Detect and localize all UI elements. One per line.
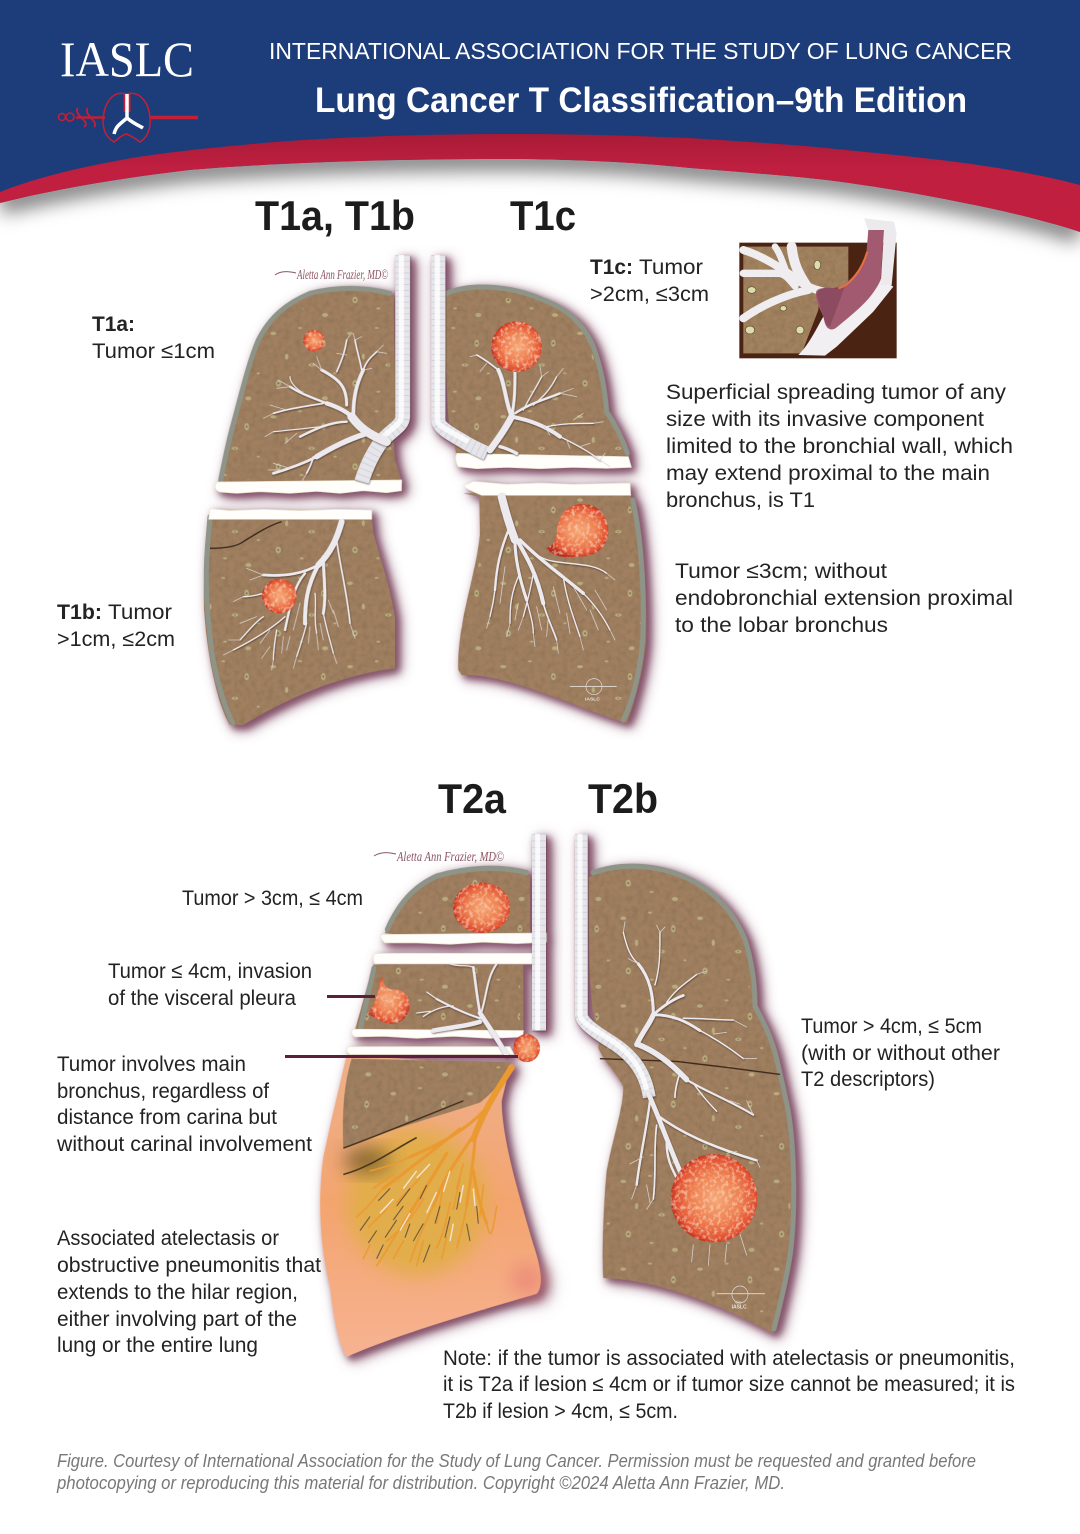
label: T1b: Tumor [108, 600, 172, 624]
note: T2b if lesion > 4cm, ≤ 5cm. [443, 1399, 678, 1423]
label: T1c [590, 255, 709, 306]
label: T1b [57, 600, 175, 651]
label: visceral pleura invasion: of the visceral pleura [108, 986, 296, 1010]
T2a atelectasis region [320, 1055, 542, 1357]
fine airways: left lower [223, 568, 355, 670]
white curve with grey shadow [0, 159, 1080, 252]
text: superficial spreading tumor: Superficial spreading tumor of any [666, 380, 1006, 404]
right upper lobe [443, 285, 630, 457]
label: visceral pleura invasion [108, 959, 312, 1010]
figure credit: photocopying or reproducing this material for distribution. Copyright ©2024 Aletta Ann Frazier, MD. [56, 1473, 785, 1493]
heading: T2a: T2a [438, 775, 507, 822]
text: superficial spreading tumor: may extend proximal to the main [666, 461, 990, 485]
T2a middle slice [347, 953, 545, 1054]
label: T1c: >2cm, ≤3cm [590, 282, 709, 306]
bronchial tree: right upper [477, 355, 600, 460]
cut lobe edges [209, 453, 631, 519]
label: T2b tumor: Tumor > 4cm, ≤ 5cm [801, 1014, 982, 1038]
text: tumor up to 3cm: Tumor ≤3cm; without [675, 559, 887, 583]
label: main bronchus involvement: Tumor involves main [57, 1052, 246, 1076]
heading: T1a, T1b: T1a, T1b [255, 192, 415, 239]
label: main bronchus involvement [56, 1052, 312, 1156]
IASLC mark: T2 [717, 1286, 765, 1311]
heading: T1c: T1c [510, 192, 576, 239]
IASLC mark: T1 [570, 679, 617, 703]
label: atelectasis or pneumonitis: Associated atelectasis or [57, 1226, 279, 1250]
bronchial tree: right lower [490, 497, 610, 640]
label: atelectasis or pneumonitis: either involving part of the [57, 1307, 297, 1331]
text: tumor up to 3cm: endobronchial extension proximal [675, 586, 1013, 610]
T2a upper slice [381, 868, 547, 944]
text: superficial spreading tumor: size with its invasive component [666, 407, 984, 431]
note: Note: if the tumor is associated with atelectasis or pneumonitis, [443, 1346, 1015, 1370]
IASLC mark: T2: IASLC [732, 1304, 747, 1311]
note [443, 1346, 1015, 1423]
artist signature: T2: Aletta Ann Frazier, MD© [396, 850, 504, 865]
tumor: T1b [262, 579, 297, 613]
T2b lung [588, 866, 794, 1334]
label: main bronchus involvement: distance from carina but [57, 1105, 277, 1129]
logo: IASLC: IASLC [60, 31, 194, 87]
right lower lobe [458, 493, 646, 723]
left upper lobe [218, 288, 402, 482]
left trachea and bronchus [362, 255, 403, 482]
tumor: T2a visceral pleura [367, 974, 409, 1024]
label: T1c: Tumor [639, 255, 703, 279]
label: visceral pleura invasion: Tumor ≤ 4cm, invasion [108, 959, 312, 983]
illustration: T2 lungs [320, 834, 794, 1357]
fine airways: T2b [623, 922, 760, 1266]
text: superficial spreading tumor [666, 380, 1013, 512]
tumor: T1a [303, 330, 325, 351]
right trachea and bronchus [437, 255, 487, 453]
label: T1a: T1a: [92, 312, 135, 336]
label: atelectasis or pneumonitis: obstructive pneumonitis that [57, 1253, 321, 1277]
bronchial tree: left upper [273, 340, 387, 473]
label: T1c: T1c: [590, 255, 633, 279]
label: atelectasis or pneumonitis: extends to the hilar region, [57, 1280, 298, 1304]
T2a bronchi with obstruction [357, 1067, 512, 1266]
fine airways: left upper [263, 333, 387, 482]
inset: bronchial wall detail [739, 218, 897, 358]
text: tumor up to 3cm [675, 559, 1013, 637]
tumor: T1c lower [547, 504, 608, 557]
label: T1b: >1cm, ≤2cm [57, 627, 175, 651]
label: T2b tumor: (with or without other [801, 1041, 1000, 1065]
figure credit: Figure. Courtesy of International Association for the Study of Lung Cancer. Permission must be requested and granted before [57, 1451, 976, 1471]
logo: lung and sword emblem [58, 93, 198, 142]
label: T2b tumor: T2 descriptors) [801, 1067, 935, 1091]
fine airways: right upper [470, 355, 610, 467]
logo: IASLC [58, 31, 198, 142]
tumor: T2a main bronchus [513, 1034, 540, 1062]
label: T1a [92, 312, 215, 363]
label: atelectasis or pneumonitis: lung or the entire lung [57, 1333, 258, 1357]
header: organization name: INTERNATIONAL ASSOCIATION FOR THE STUDY OF LUNG CANCER [269, 38, 1012, 64]
tumor: T2b [671, 1154, 757, 1242]
fine airways: right lower [487, 567, 615, 653]
heading: T2b: T2b [588, 775, 658, 822]
T2a lower lobe aerated part [343, 1059, 510, 1174]
artist signature: T1 [275, 268, 388, 283]
bronchial tree: T2b [623, 932, 757, 1199]
text: tumor up to 3cm: to the lobar bronchus [675, 613, 888, 637]
T2b trachea and main bronchus [580, 834, 649, 1097]
header banner [0, 0, 1080, 235]
artist signature: T2 [374, 850, 504, 865]
label: main bronchus involvement: without carinal involvement [56, 1132, 312, 1156]
IASLC mark: T1: IASLC [585, 697, 600, 703]
note: it is T2a if lesion ≤ 4cm or if tumor size cannot be measured; it is [443, 1372, 1015, 1396]
bronchial tree: T2a middle [417, 964, 507, 1055]
label: T2b tumor [801, 1014, 1000, 1091]
callout line: visceral pleura [327, 995, 375, 998]
callout line: main bronchus [285, 1055, 518, 1058]
label: main bronchus involvement: bronchus, regardless of [57, 1079, 269, 1103]
label: tumor 3 to 4cm: Tumor > 3cm, ≤ 4cm [182, 886, 363, 910]
label: T1b: T1b: [57, 600, 102, 624]
header: main title: Lung Cancer T Classification–9th Edition [315, 81, 967, 120]
label: atelectasis or pneumonitis [57, 1226, 321, 1357]
red curved band [0, 134, 1080, 232]
text: superficial spreading tumor: bronchus, is T1 [666, 488, 815, 512]
tumor: T2a upper [453, 882, 510, 933]
T2a trachea [538, 834, 539, 1031]
figure credit [56, 1451, 976, 1493]
artist signature: T1: Aletta Ann Frazier, MD© [296, 268, 388, 283]
tumor: T1c upper [491, 321, 542, 372]
left lower lobe [204, 517, 395, 725]
illustration: T1 lungs [204, 255, 646, 725]
text: superficial spreading tumor: limited to the bronchial wall, which [666, 434, 1013, 458]
label: T1a: Tumor ≤1cm [92, 339, 215, 363]
bronchial tree: left lower [233, 522, 350, 660]
